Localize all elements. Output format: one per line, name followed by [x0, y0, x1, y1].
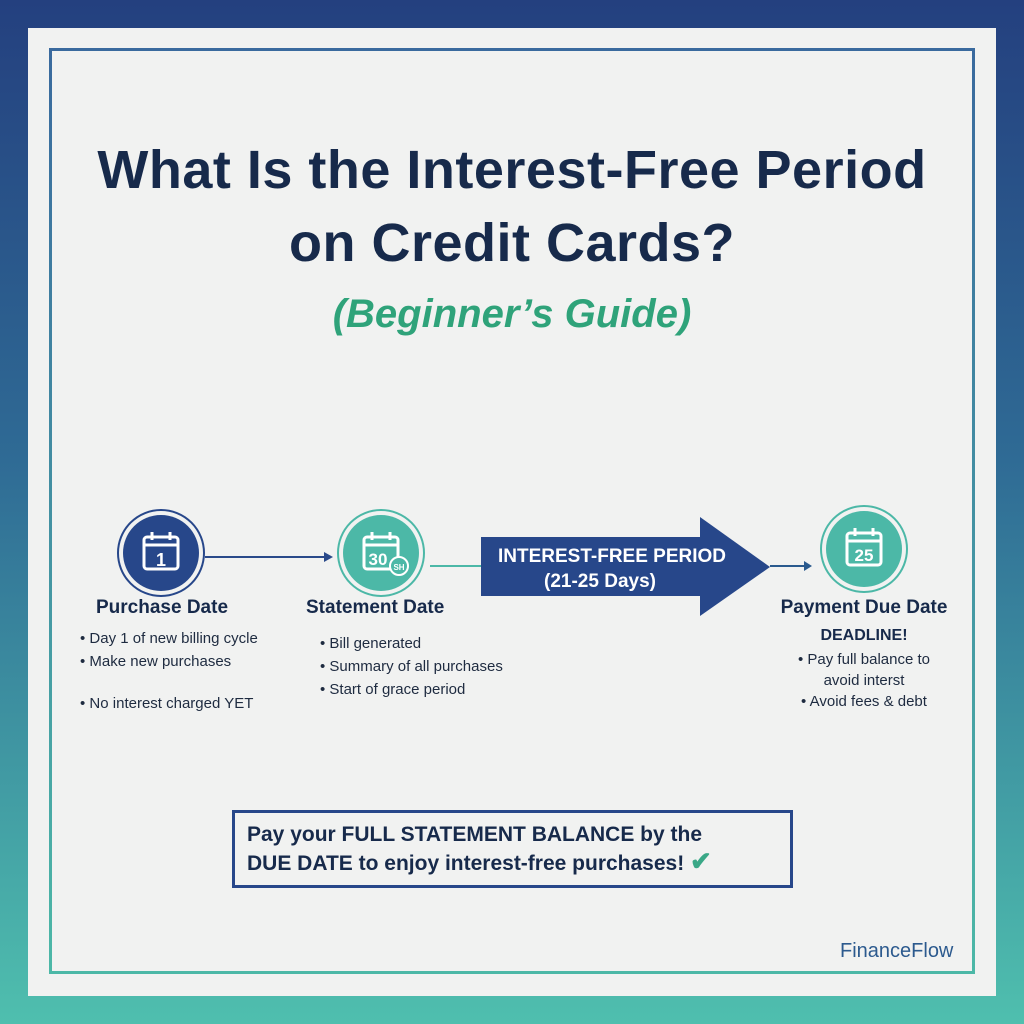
bullets: due date: avoid interst	[824, 672, 904, 689]
callout box: DUE DATE to enjoy interest-free purchases! ✔	[247, 846, 712, 876]
icon: statement date calendar: 30	[369, 550, 387, 569]
bullets: statement date: Bill generated	[329, 635, 421, 652]
heading: purchase date: Purchase Date	[96, 597, 228, 618]
bullets: purchase date	[80, 630, 258, 712]
arrow: to due date	[770, 561, 812, 571]
panel: payment due date text	[781, 597, 947, 710]
callout box: Pay your FULL STATEMENT BALANCE by the	[247, 823, 702, 846]
bullets: due date: Pay full balance to	[807, 651, 930, 668]
callout box	[232, 810, 793, 888]
subtitle: (Beginner’s Guide)	[333, 292, 691, 336]
icon: purchase date calendar: 1	[156, 550, 166, 570]
icon: due date calendar	[821, 506, 907, 592]
title: on Credit Cards?	[289, 213, 735, 273]
arrow: purchase to statement	[205, 552, 333, 562]
bullets: statement date: Summary of all purchases	[329, 658, 503, 675]
bullets: purchase date: No interest charged YET	[89, 695, 253, 712]
bullets: purchase date: Day 1 of new billing cycle	[89, 630, 258, 647]
bullets: due date: Avoid fees & debt	[810, 693, 927, 710]
bullets: purchase date: Make new purchases	[89, 653, 231, 670]
icon: purchase date calendar	[118, 510, 204, 596]
deadline label: DEADLINE!	[820, 627, 908, 644]
icon: statement date calendar: SH	[393, 563, 405, 572]
title: What Is the Interest-Free Period	[97, 140, 927, 200]
icon: due date calendar: 25	[855, 546, 873, 565]
big arrow: interest-free period	[481, 517, 770, 616]
heading: payment due date: Payment Due Date	[781, 597, 947, 618]
heading: statement date: Statement Date	[306, 597, 444, 618]
big arrow: interest-free period: INTEREST-FREE PERIOD	[498, 546, 726, 567]
brand logo text: FinanceFlow	[840, 940, 953, 962]
panel: purchase date text	[80, 597, 258, 712]
title	[97, 140, 927, 273]
bullets: statement date: Start of grace period	[329, 681, 465, 698]
icon: statement date calendar	[338, 510, 424, 596]
bullets: statement date	[320, 635, 503, 698]
connector line to period arrow	[430, 565, 482, 567]
big arrow: interest-free period: (21-25 Days)	[544, 571, 656, 592]
panel: statement date text	[306, 597, 503, 698]
bullets: due date	[798, 651, 930, 710]
